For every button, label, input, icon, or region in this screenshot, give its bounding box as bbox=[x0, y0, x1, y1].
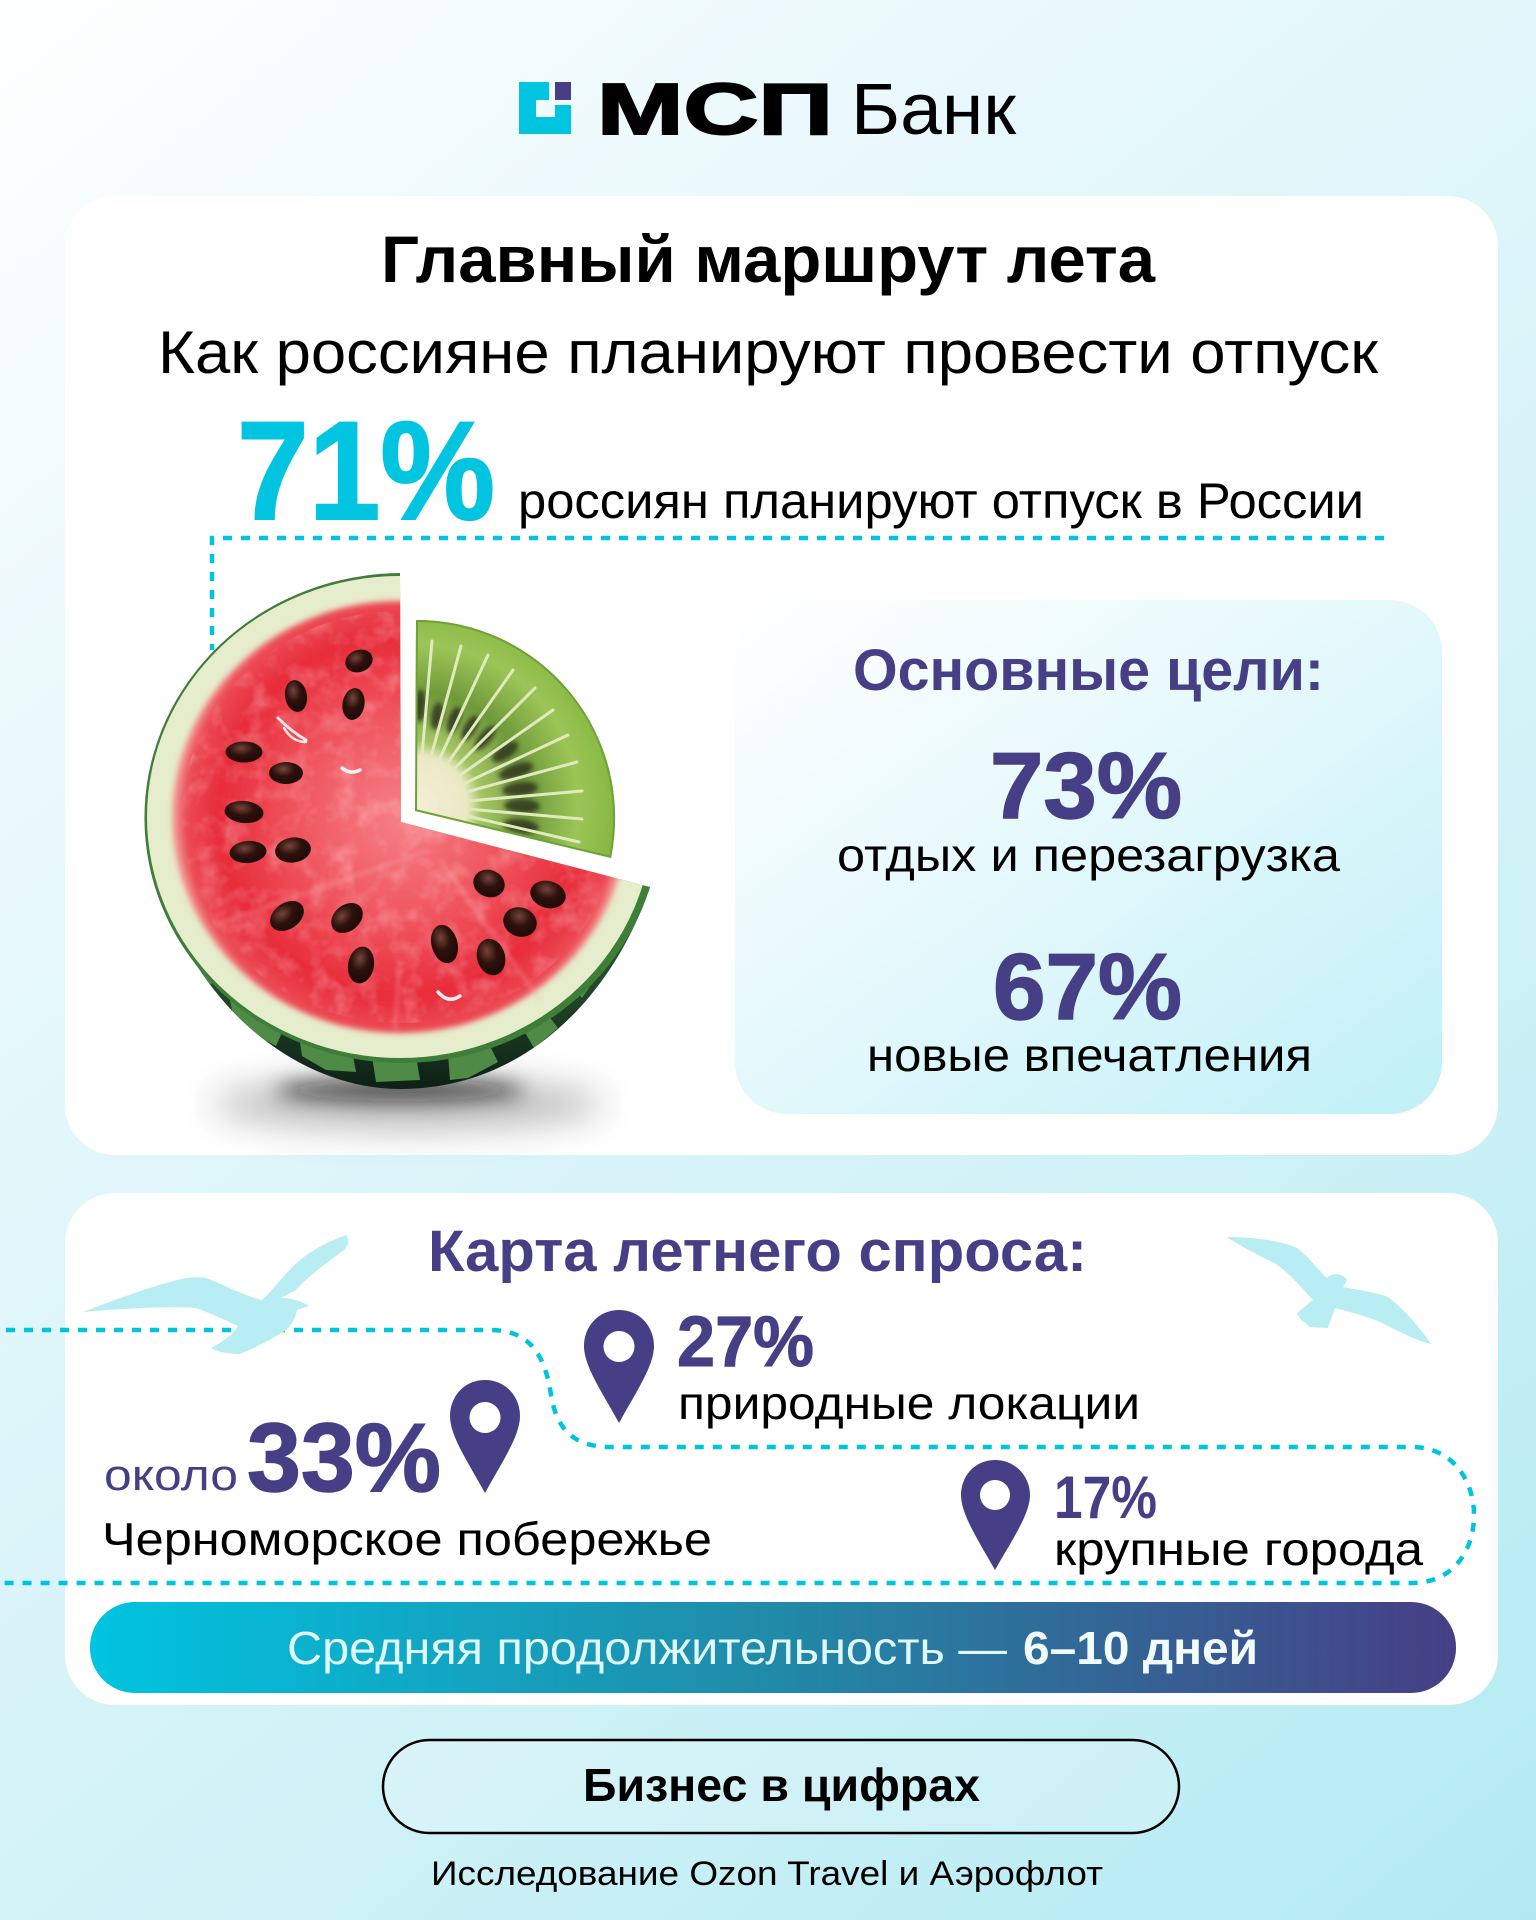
stat: 71% bbox=[237, 392, 1364, 549]
icon: pin 17% bbox=[961, 1460, 1030, 1570]
stat: 71%: 71% bbox=[237, 392, 495, 549]
source note: Исследование Ozon Travel и Аэрофлот bbox=[431, 1855, 1103, 1893]
melon rind bbox=[146, 790, 650, 1089]
stat: 67% bbox=[867, 934, 1312, 1081]
duration bar: 6–10 дней bbox=[1023, 1622, 1258, 1674]
stat: 17% big cities: крупные города bbox=[1054, 1523, 1423, 1575]
duration bar bbox=[90, 1602, 1456, 1693]
subtitle: Как россияне планируют провести отпуск bbox=[158, 319, 1379, 386]
stat: 27% nature: 27% bbox=[677, 1303, 814, 1382]
logo: МСП Банк: Банк bbox=[851, 70, 1017, 150]
icon: pin 33% bbox=[450, 1380, 520, 1493]
title: Главный маршрут лета bbox=[381, 222, 1156, 296]
stat: 71%: россиян планируют отпуск в России bbox=[518, 473, 1364, 529]
stat: 17% big cities: 17% bbox=[1054, 1464, 1157, 1531]
kiwi slice bbox=[415, 620, 616, 858]
duration bar: Средняя продолжительность — bbox=[287, 1622, 1007, 1674]
map heading: Карта летнего спроса: bbox=[428, 1219, 1087, 1284]
stat: 73%: 73% bbox=[990, 733, 1182, 838]
icon: pin 27% bbox=[584, 1310, 654, 1423]
watermelon pie chart illustration bbox=[138, 567, 662, 1128]
dashed connector from 71% to melon bbox=[212, 538, 1384, 650]
stat: 33% Black Sea coast: 33% bbox=[247, 1403, 441, 1512]
pill: business in numbers bbox=[383, 1740, 1179, 1833]
logo: МСП Банк: МСП bbox=[597, 70, 833, 150]
panel: summer demand map bbox=[0, 1193, 1498, 1705]
icon: right seagull bbox=[1227, 1237, 1431, 1344]
stat: 73%: отдых и перезагрузка bbox=[837, 829, 1340, 881]
stat: 67%: 67% bbox=[993, 934, 1182, 1039]
pill: business in numbers: Бизнес в цифрах bbox=[583, 1759, 980, 1811]
stat: 27% nature bbox=[584, 1303, 1140, 1429]
goals heading: Основные цели: bbox=[853, 638, 1324, 703]
stat: 27% nature: природные локации bbox=[678, 1377, 1140, 1429]
melon water highlights bbox=[278, 718, 460, 999]
logo: МСП Банк bbox=[519, 70, 1017, 150]
stat: 67%: новые впечатления bbox=[867, 1029, 1312, 1081]
icon: left seagull bbox=[83, 1235, 348, 1354]
panel: main route bbox=[65, 196, 1498, 1155]
melon shadow bbox=[213, 1079, 603, 1128]
melon face bbox=[138, 567, 662, 1067]
stat: 33% Black Sea coast: Черноморское побережье bbox=[102, 1513, 712, 1565]
stat: 73% bbox=[837, 733, 1340, 881]
stat: 33% Black Sea coast: около bbox=[104, 1451, 238, 1500]
panel: main goals bbox=[735, 600, 1442, 1114]
melon seeds bbox=[224, 646, 569, 985]
stat: 17% big cities bbox=[961, 1460, 1423, 1575]
stat: 33% Black Sea coast bbox=[102, 1380, 712, 1565]
dashed route line bbox=[0, 1330, 1474, 1583]
